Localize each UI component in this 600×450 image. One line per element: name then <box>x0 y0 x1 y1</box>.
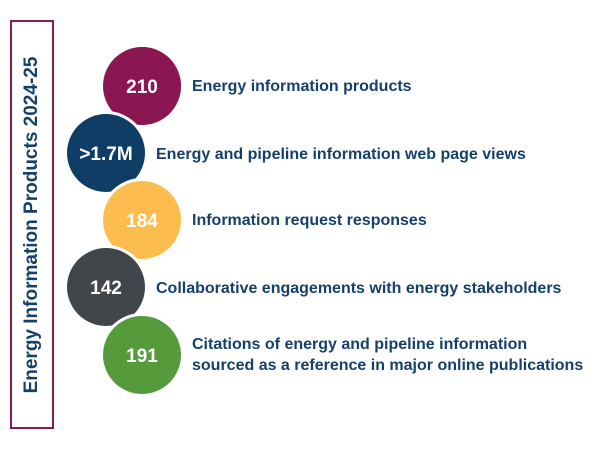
circle: 142 <box>64 245 148 329</box>
circle: >1.7M: >1.7M <box>79 144 133 165</box>
label 3: Information request responses <box>192 212 427 229</box>
label 5: sourced as a reference in major online publications <box>192 357 583 374</box>
label 1: Energy information products <box>192 78 412 95</box>
circle: 184: 184 <box>126 211 158 232</box>
label 4: Collaborative engagements with energy stakeholders <box>156 280 561 297</box>
label 5 <box>192 336 583 374</box>
side title box <box>10 20 54 429</box>
circle: 191 <box>100 313 184 397</box>
circle: 184 <box>100 178 184 262</box>
circle: 191: 191 <box>126 346 158 367</box>
label 5: Citations of energy and pipeline information <box>192 336 527 353</box>
circle: 210 <box>103 47 181 125</box>
circle: >1.7M <box>64 111 148 195</box>
side title text: Energy Information Products 2024-25 <box>21 56 42 393</box>
circle: 142: 142 <box>90 278 122 299</box>
circle: 210: 210 <box>126 77 158 98</box>
label 2: Energy and pipeline information web page views <box>156 146 526 163</box>
